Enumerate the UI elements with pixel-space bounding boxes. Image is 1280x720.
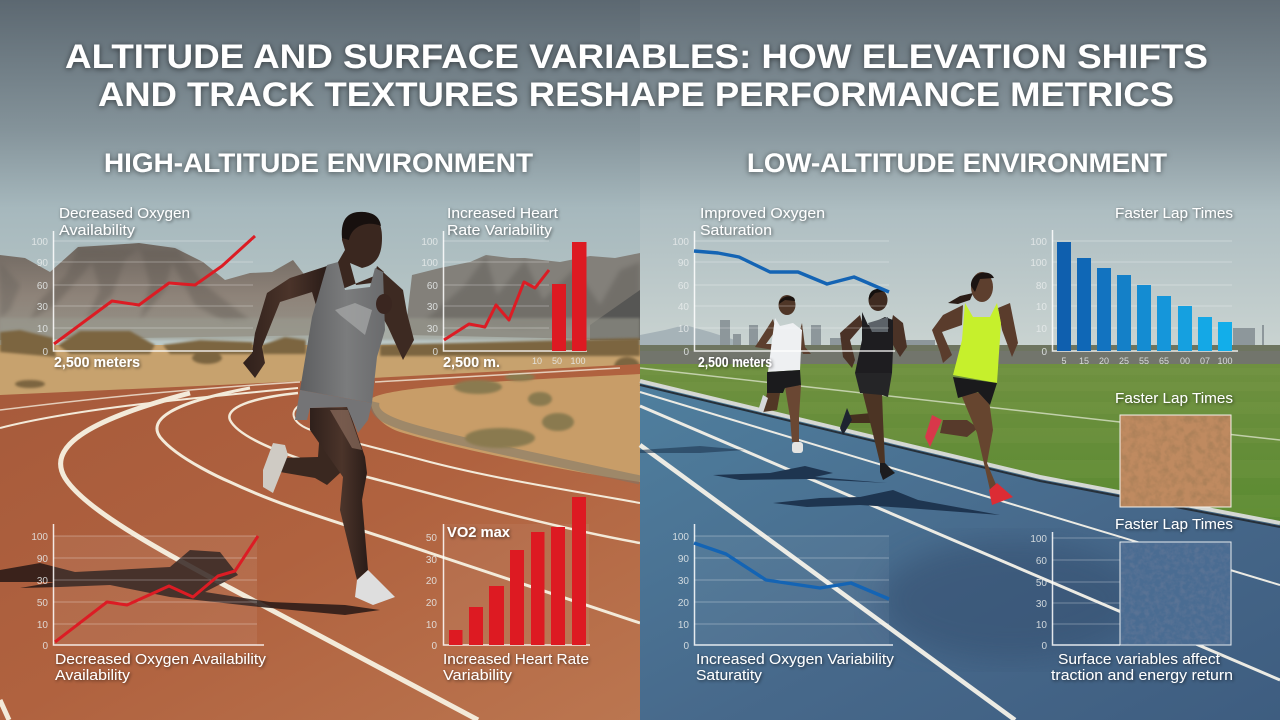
chart: faster lap times bars: 100 [1217, 356, 1233, 366]
chart: increased heart rate variability, top left-center [421, 205, 587, 371]
head [868, 289, 888, 311]
chart: increased heart rate variability, top left-center: 100 [570, 356, 586, 366]
chart: increased oxygen variability: 10 [678, 620, 689, 631]
chart: improved oxygen saturation: 90 [678, 258, 689, 269]
back leg [763, 393, 780, 412]
chart: increased heart rate variability, top left-center: 10 [532, 356, 542, 366]
front shoe [880, 463, 895, 480]
chart: faster lap times bars: Faster Lap Times [1115, 205, 1233, 222]
chart: increased oxygen variability [672, 524, 895, 684]
chart: decreased oxygen availability, bottom left: Availability [55, 667, 131, 684]
chart: decreased oxygen availability, bottom left: 0 [42, 641, 48, 652]
blue track lane lines [640, 392, 1280, 720]
chart: decreased oxygen availability, top left: 100 [31, 237, 48, 248]
sand infield [371, 374, 640, 482]
chart: improved oxygen saturation: 0 [683, 347, 689, 358]
chart: increased oxygen variability: 90 [678, 554, 689, 565]
chart: decreased oxygen availability, bottom left: 90 [37, 554, 48, 565]
chart: VO2 max bars: 50 [426, 533, 437, 544]
panel: high-altitude scene [0, 0, 640, 720]
city skyline [640, 320, 1280, 351]
head [971, 272, 993, 302]
surface swatch: red track texture [1115, 390, 1233, 507]
back shoe [758, 395, 768, 413]
chart: surface variables with blue texture: 30 [1036, 599, 1047, 610]
front leg [785, 385, 801, 442]
chart: faster lap times bars: 20 [1099, 356, 1109, 366]
neck and head [338, 212, 384, 290]
runner: athlete in neon singlet [925, 272, 1018, 505]
back arm [243, 266, 327, 378]
chart: improved oxygen saturation: 100 [672, 237, 689, 248]
heading: low-altitude: LOW-ALTITUDE ENVIRONMENT [747, 148, 1168, 178]
chart: increased heart rate variability, top left-center: 2,500 m. [443, 354, 500, 371]
black singlet [855, 312, 893, 373]
front leg [862, 390, 885, 463]
chart: decreased oxygen availability, top left: Availability [59, 222, 136, 239]
chart: surface variables with blue texture: 50 [1036, 578, 1047, 589]
chart: faster lap times bars [1030, 205, 1238, 366]
shorts [953, 377, 997, 405]
front shoe [355, 570, 395, 605]
chart: increased heart rate variability, top left-center: 30 [427, 324, 438, 335]
chart: improved oxygen saturation: Saturation [700, 222, 772, 239]
chart: increased oxygen variability: 100 [672, 532, 689, 543]
chart: decreased oxygen availability, top left: 60 [37, 281, 48, 292]
chart: surface variables with blue texture: 10 [1036, 620, 1047, 631]
runner: male athlete in grey singlet [243, 212, 414, 605]
runner shadows [640, 446, 1000, 515]
chart: faster lap times bars: 10 [1036, 324, 1047, 335]
title: AND TRACK TEXTURES RESHAPE PERFORMANCE METRICS [98, 76, 1174, 114]
chart: VO2 max bars [426, 497, 590, 684]
heading: high-altitude: HIGH-ALTITUDE ENVIRONMENT [104, 148, 534, 178]
chart: faster lap times bars: 25 [1119, 356, 1129, 366]
chart: faster lap times bars: 100 [1030, 258, 1047, 269]
arms [840, 315, 907, 368]
chart: increased heart rate variability, top left-center: Increased Heart [447, 205, 559, 222]
back leg [850, 413, 872, 423]
front leg [960, 392, 997, 490]
chart: improved oxygen saturation: 60 [678, 281, 689, 292]
chart: surface variables with blue texture: 100 [1030, 534, 1047, 545]
chart: VO2 max bars: Variability [443, 667, 513, 684]
title [65, 38, 1208, 114]
chart: increased heart rate variability, top left-center: 30 [427, 302, 438, 313]
chart: increased heart rate variability, top left-center: 0 [432, 347, 438, 358]
chart: increased heart rate variability, top left-center: 50 [552, 356, 562, 366]
runner shadow [0, 550, 380, 615]
chart: VO2 max bars: Increased Heart Rate [443, 651, 589, 668]
back shoe [840, 408, 852, 435]
chart: VO2 max bars: 0 [431, 641, 437, 652]
chart: decreased oxygen availability, top left: 10 [37, 324, 48, 335]
title: ALTITUDE AND SURFACE VARIABLES: HOW ELEVATION SHIFTS [65, 38, 1208, 76]
chart: faster lap times bars: 0 [1041, 347, 1047, 358]
chart: increased oxygen variability: 0 [683, 641, 689, 652]
chart: faster lap times bars: 00 [1180, 356, 1190, 366]
panel: low-altitude scene [640, 0, 1280, 720]
arms [932, 303, 1018, 363]
runner: athlete in black singlet [840, 289, 907, 480]
chart: surface variables with blue texture: Surface variables affect [1058, 651, 1221, 668]
chart: decreased oxygen availability, top left: 0 [42, 347, 48, 358]
chart: surface variables with blue texture [1030, 516, 1233, 684]
grass field [640, 364, 1280, 534]
chart: increased heart rate variability, top left-center: Rate Variability [447, 222, 553, 239]
chart: decreased oxygen availability, top left: 30 [37, 302, 48, 313]
head [778, 295, 796, 315]
curb [640, 381, 1280, 523]
front shoe [989, 483, 1013, 505]
chart: surface variables with blue texture: 60 [1036, 556, 1047, 567]
chart: increased oxygen variability: Saturatity [696, 667, 763, 684]
back leg [940, 420, 978, 437]
chart: improved oxygen saturation: Improved Oxygen [700, 205, 825, 222]
neon singlet [953, 303, 1001, 383]
chart: decreased oxygen availability, bottom left [31, 524, 267, 684]
back shoe [925, 415, 942, 447]
back leg [280, 430, 345, 485]
chart: VO2 max bars: VO2 max [447, 524, 511, 541]
fist [376, 294, 392, 314]
mowing stripes [640, 368, 1280, 517]
chart: decreased oxygen availability, top left: 2,500 meters [54, 354, 140, 371]
chart: improved oxygen saturation [672, 205, 895, 371]
desert bushes [0, 330, 640, 388]
surface swatch: red track texture: Faster Lap Times [1115, 390, 1233, 407]
chart: increased oxygen variability: 30 [678, 576, 689, 587]
chart: increased heart rate variability, top left-center: 100 [421, 237, 438, 248]
chart: improved oxygen saturation: 10 [678, 324, 689, 335]
chart: faster lap times bars: 65 [1159, 356, 1169, 366]
chart: faster lap times bars: 80 [1036, 281, 1047, 292]
chart: increased oxygen variability: 20 [678, 598, 689, 609]
chart: faster lap times bars: 15 [1079, 356, 1089, 366]
chart: decreased oxygen availability, bottom left: Decreased Oxygen Availability [55, 651, 267, 668]
runner: athlete in white singlet [755, 295, 811, 453]
chart: increased heart rate variability, top left-center: 60 [427, 281, 438, 292]
chart: surface variables with blue texture: 0 [1041, 641, 1047, 652]
back shoe [263, 443, 288, 493]
chart: decreased oxygen availability, top left [31, 205, 255, 371]
shorts [855, 373, 892, 397]
mountain range left [0, 243, 640, 340]
chart: VO2 max bars: 10 [426, 620, 437, 631]
chart: faster lap times bars: 5 [1061, 356, 1067, 366]
chart: decreased oxygen availability, top left: Decreased Oxygen [59, 205, 190, 222]
blue track [640, 383, 1280, 720]
singlet [300, 262, 385, 403]
chart: increased oxygen variability: Increased Oxygen Variability [696, 651, 895, 668]
chart: increased heart rate variability, top left-center: 100 [421, 258, 438, 269]
chart: decreased oxygen availability, bottom left: 10 [37, 620, 48, 631]
chart: faster lap times bars: 55 [1139, 356, 1149, 366]
chart: surface variables with blue texture: traction and energy return [1051, 667, 1233, 684]
shorts [295, 390, 372, 433]
front arm [377, 272, 414, 360]
chart: decreased oxygen availability, bottom left: 50 [37, 598, 48, 609]
chart: improved oxygen saturation: 2,500 meters [698, 354, 772, 371]
sand ground [0, 345, 640, 415]
chart: surface variables with blue texture: Faster Lap Times [1115, 516, 1233, 533]
chart: decreased oxygen availability, top left: 90 [37, 258, 48, 269]
chart: VO2 max bars: 20 [426, 598, 437, 609]
running track [0, 364, 640, 720]
chart: VO2 max bars: 30 [426, 555, 437, 566]
chart: decreased oxygen availability, bottom left: 100 [31, 532, 48, 543]
track lane lines [0, 368, 640, 720]
chart: faster lap times bars: 10 [1036, 302, 1047, 313]
front leg [310, 407, 368, 580]
shorts [767, 370, 801, 393]
ponytail [948, 293, 973, 304]
front shoe [792, 442, 803, 453]
white singlet [768, 318, 802, 372]
chart: faster lap times bars: 07 [1200, 356, 1210, 366]
chart: faster lap times bars: 100 [1030, 237, 1047, 248]
chart: improved oxygen saturation: 40 [678, 302, 689, 313]
arms [755, 319, 811, 354]
chart: VO2 max bars: 20 [426, 576, 437, 587]
chart: decreased oxygen availability, bottom left: 30 [37, 576, 48, 587]
